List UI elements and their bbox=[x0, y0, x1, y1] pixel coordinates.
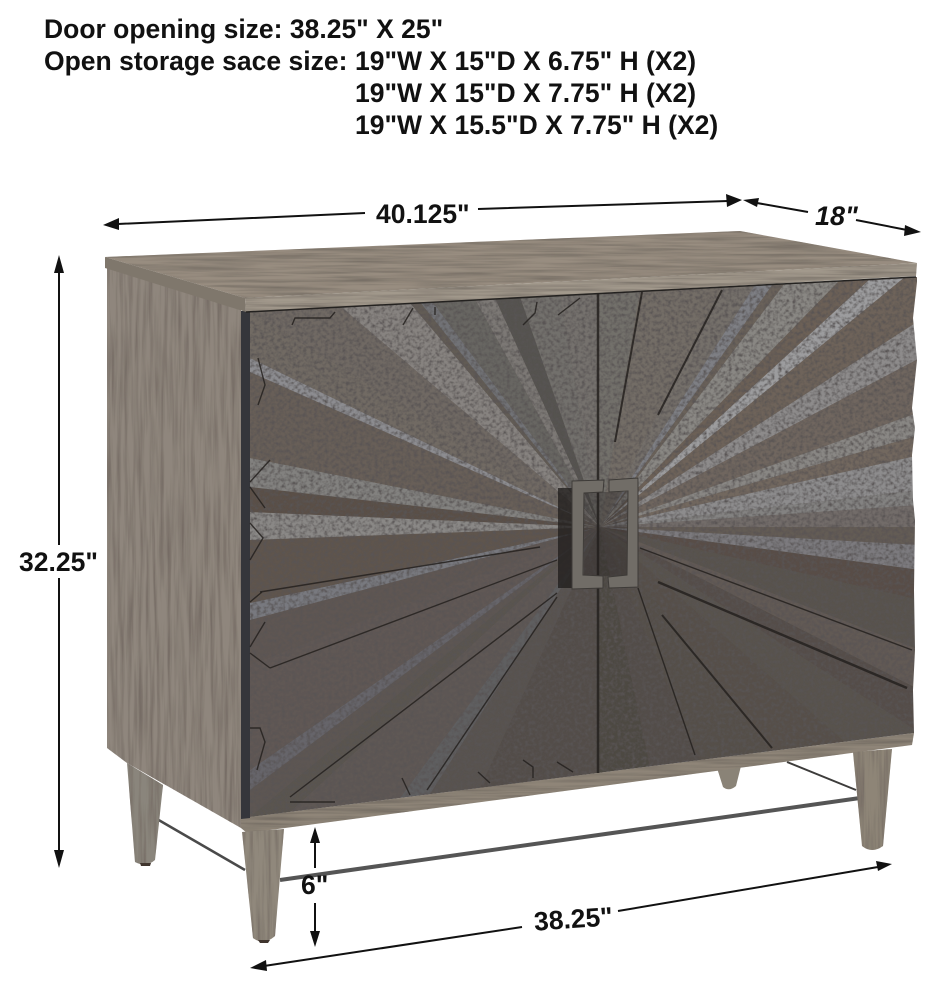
dimension: width 40.125 bbox=[103, 194, 742, 230]
handle shadow bbox=[558, 488, 572, 588]
front legs bbox=[242, 749, 892, 943]
dimension: base width 38.25: 38.25" bbox=[533, 901, 614, 937]
dimension: base width 38.25 bbox=[250, 861, 892, 971]
dimension: width 40.125: 40.125" bbox=[376, 199, 470, 229]
side panel bbox=[107, 268, 241, 828]
doors with sunburst shards bbox=[250, 277, 920, 817]
back legs and stretcher bars bbox=[127, 762, 860, 880]
bottom rail bbox=[241, 733, 914, 833]
right door sunburst bbox=[598, 277, 920, 773]
cabinet top bbox=[105, 231, 917, 312]
dimension: height 32.25 bbox=[19, 255, 98, 868]
illustration: cabinet bbox=[105, 231, 920, 943]
text block: opening and storage sizes: 19"W X 15"D X 6.75" H (X2) bbox=[355, 46, 696, 76]
text block: opening and storage sizes: Open storage sace size: bbox=[44, 46, 347, 76]
left door sunburst bbox=[250, 293, 600, 817]
text block: opening and storage sizes: Door opening size: 38.25" X 25" bbox=[44, 14, 443, 44]
text block: opening and storage sizes: 19"W X 15"D X 7.75" H (X2) bbox=[355, 78, 696, 108]
door handle bbox=[572, 478, 638, 589]
dark side strip bbox=[241, 311, 250, 819]
dimension: depth 18: 18" bbox=[815, 201, 859, 231]
dimension: leg height 6: 6" bbox=[301, 870, 328, 900]
dimension: leg height 6 bbox=[301, 827, 328, 947]
dimension: height 32.25: 32.25" bbox=[19, 547, 98, 577]
text block: opening and storage sizes bbox=[44, 14, 718, 140]
handle interior shadow bbox=[584, 492, 628, 576]
text block: opening and storage sizes: 19"W X 15.5"D X 7.75" H (X2) bbox=[355, 110, 718, 140]
dimension: depth 18 bbox=[743, 198, 921, 236]
door seam and carved lines bbox=[250, 290, 912, 802]
